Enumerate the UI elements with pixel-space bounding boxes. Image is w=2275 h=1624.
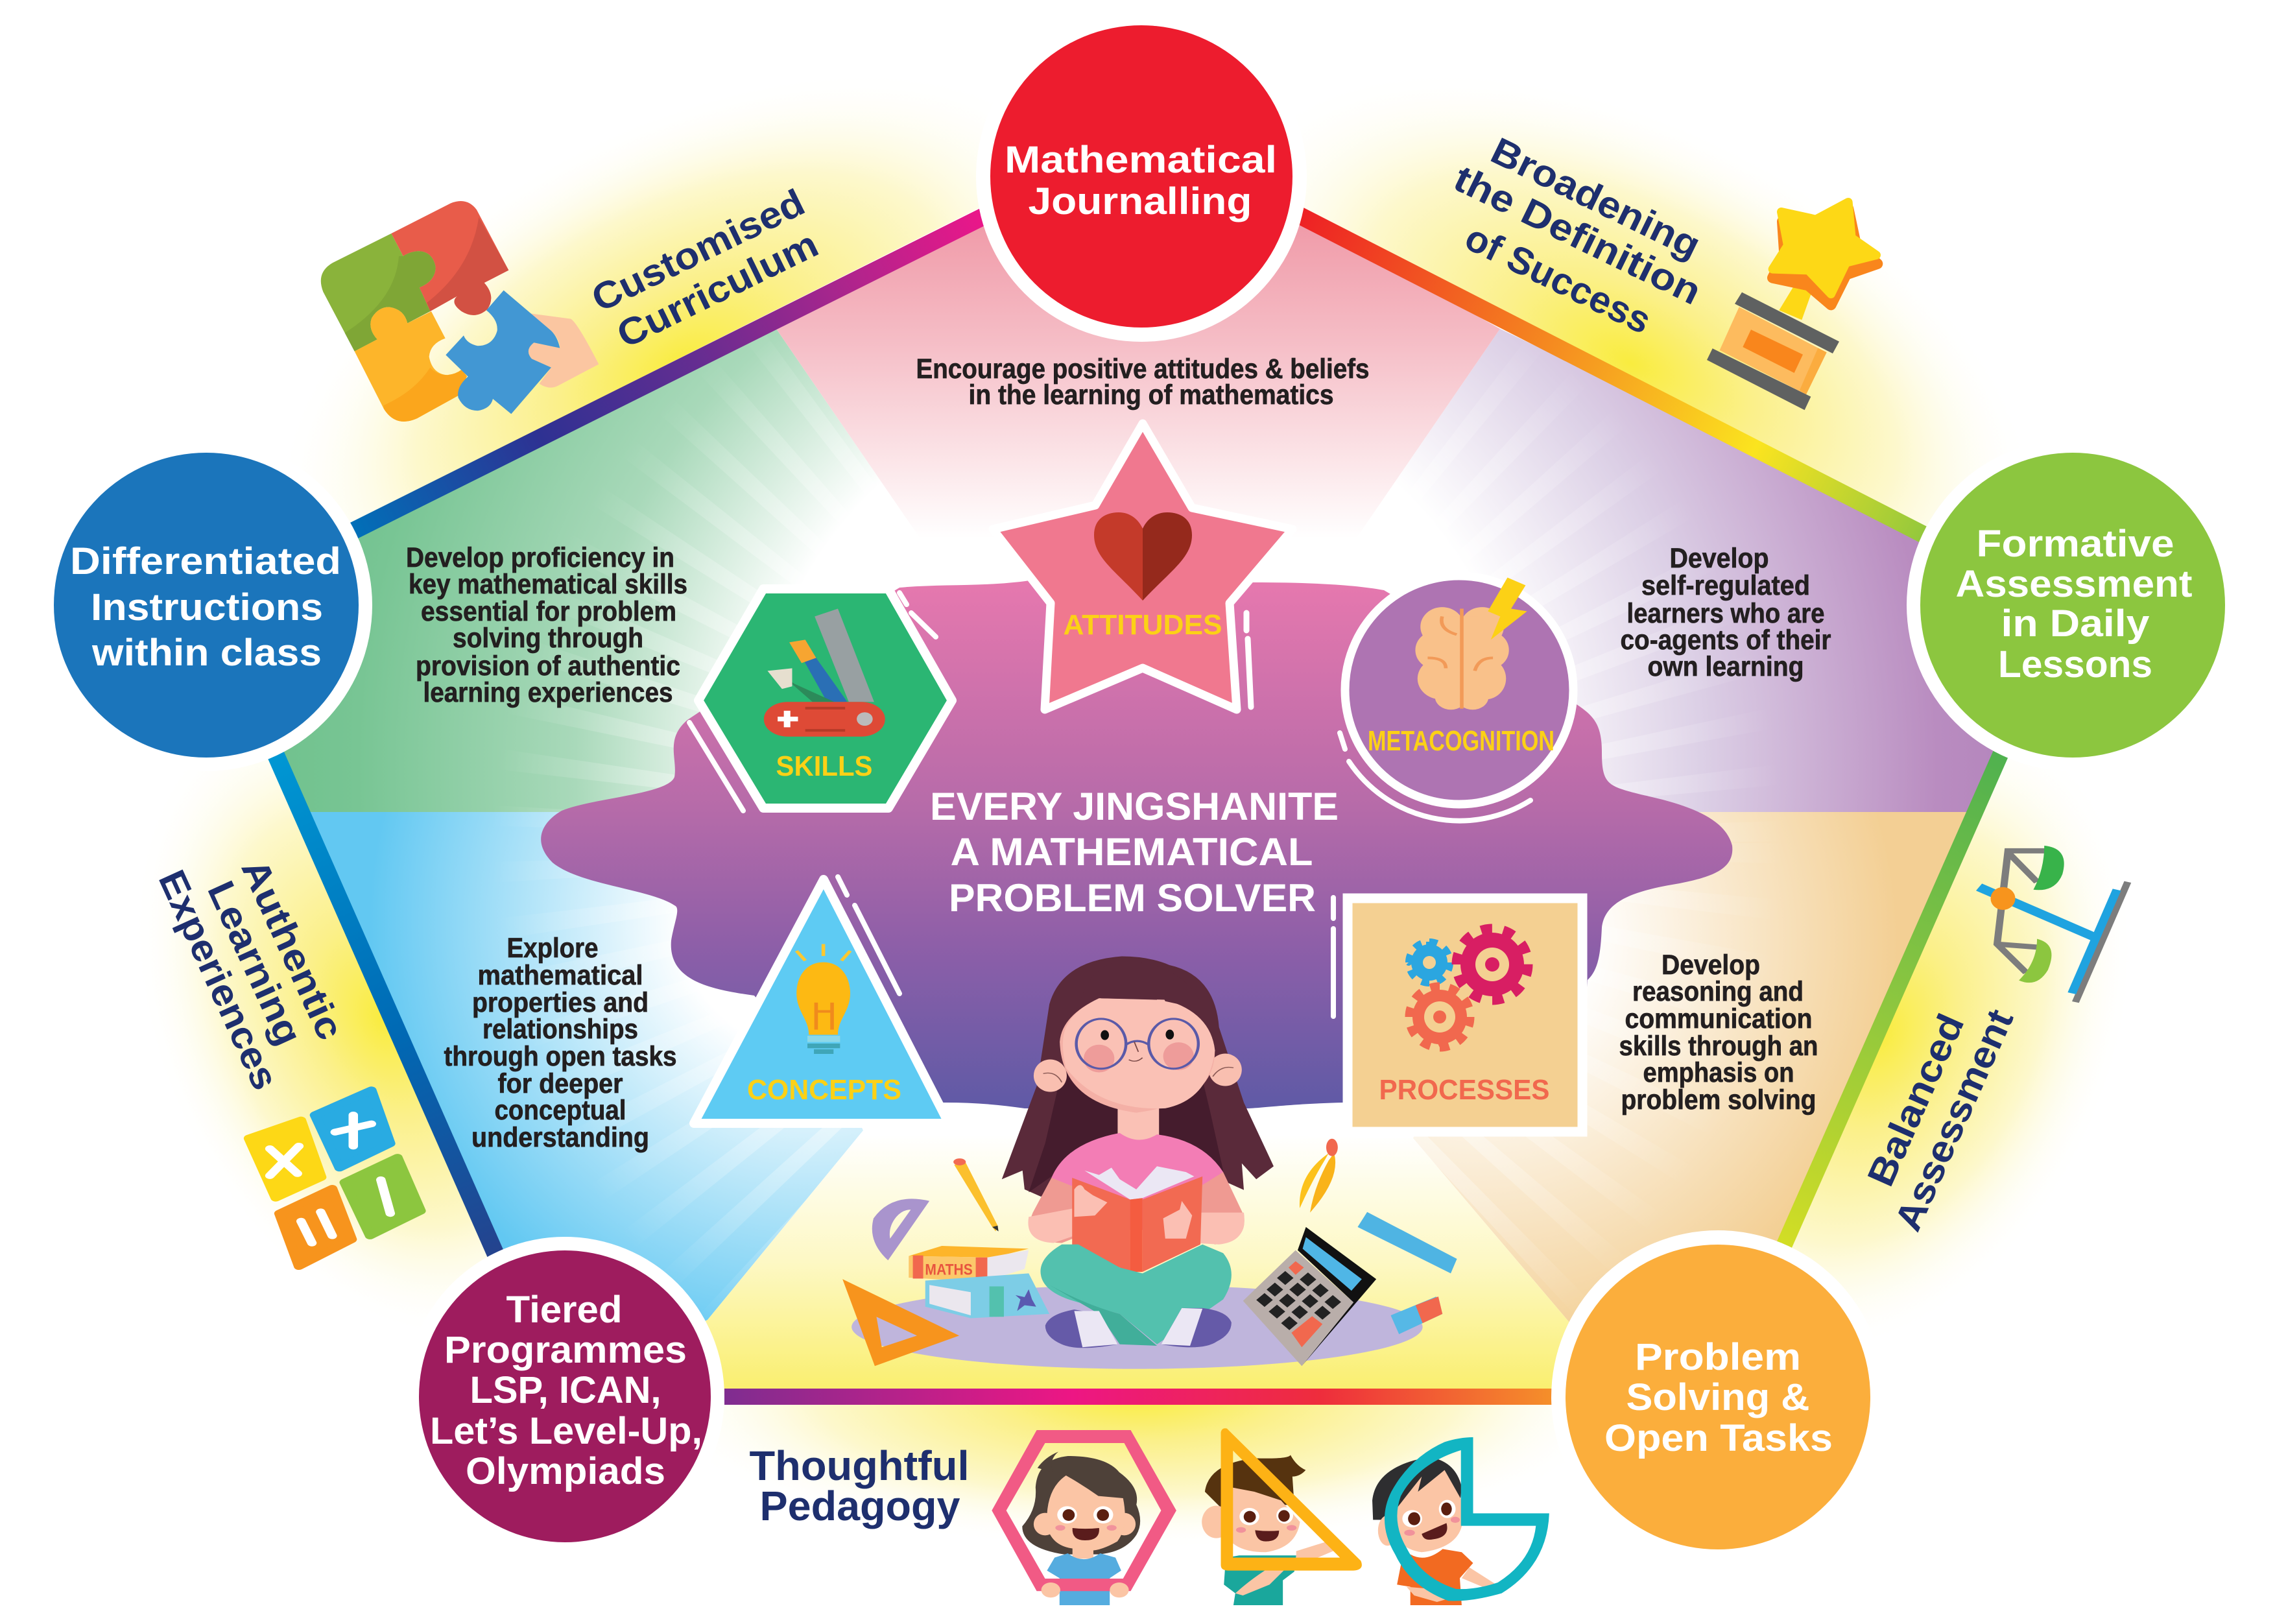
- icon: maths operator tiles: [249, 1090, 421, 1266]
- text block: concepts: through open tasks: [444, 1041, 677, 1072]
- icon panel: concepts triangle: [694, 877, 949, 1123]
- sector: concepts blue: [310, 812, 863, 1320]
- face: [1060, 998, 1215, 1113]
- label: Broadening the Definition of Success: [1447, 130, 1708, 342]
- label: Broadening the Definition of Success: the Definition: [1447, 157, 1708, 313]
- eraser: [1390, 1296, 1442, 1334]
- sector: processes beige: [1413, 812, 1966, 1322]
- icon: gears: [1409, 929, 1528, 1047]
- label: Customised Curriculum: [585, 181, 825, 356]
- text block: processes: communication: [1625, 1003, 1812, 1034]
- book pages: [1084, 1166, 1194, 1200]
- label: Authentic Learning Experiences: [150, 853, 351, 1096]
- icon panel: skills hexagon: [689, 589, 952, 811]
- text block: processes: Develop: [1662, 949, 1760, 981]
- icon: light bulb: [796, 944, 850, 1054]
- text block: metacognition: own learning: [1647, 651, 1804, 682]
- label: Authentic Learning Experiences: Authentic: [233, 853, 351, 1046]
- mouth and nose: [1129, 1042, 1143, 1061]
- circle: Tiered Programmes: Let’s Level-Up,: [430, 1410, 702, 1452]
- text block: concepts: Explore: [507, 933, 598, 964]
- icon: puzzle: [321, 201, 599, 422]
- neck: [1117, 1105, 1159, 1143]
- text block: attitudes: [916, 353, 1370, 411]
- circle: Formative Assessment: [1907, 439, 2239, 771]
- calculator: [1243, 1227, 1376, 1366]
- text block: processes: skills through an: [1619, 1031, 1818, 1062]
- glasses: [1077, 1019, 1198, 1069]
- label: Thoughtful Pedagogy: Thoughtful: [750, 1442, 969, 1489]
- text block: processes: [1619, 949, 1818, 1116]
- circle: Differentiated Instructions: Instructions: [91, 586, 323, 628]
- circle: Tiered Programmes: [405, 1237, 724, 1556]
- pencil: [953, 1158, 999, 1232]
- circle: Tiered Programmes: Olympiads: [466, 1450, 665, 1492]
- circle: Formative Assessment: in Daily: [2001, 603, 2149, 645]
- label: Authentic Learning Experiences: Experiences: [150, 864, 287, 1096]
- label: maths book: MATHS: [925, 1261, 973, 1278]
- label: Authentic Learning Experiences: Learning: [199, 875, 310, 1051]
- label: Customised Curriculum: Customised: [585, 181, 811, 320]
- text block: metacognition: self-regulated: [1641, 570, 1810, 601]
- text block: concepts: mathematical: [477, 960, 643, 991]
- icon: balance scale: [1979, 846, 2128, 1002]
- icon: trophy: [1707, 202, 1877, 410]
- mat: [852, 1285, 1423, 1369]
- label: processes: PROCESSES: [1379, 1074, 1550, 1106]
- central title: EVERY JINGSHANITE: [930, 785, 1339, 828]
- icon panel: attitudes star: [993, 424, 1292, 710]
- icon panel: metacognition circle: [1340, 576, 1573, 821]
- text block: skills: key mathematical skills: [409, 569, 687, 600]
- circle: Differentiated Instructions: [40, 439, 372, 771]
- ears: [1034, 1054, 1242, 1092]
- text block: processes: problem solving: [1621, 1084, 1816, 1116]
- central title: [930, 785, 1339, 920]
- text block: skills: provision of authentic: [416, 651, 680, 682]
- label: Customised Curriculum: Curriculum: [610, 223, 825, 356]
- sector: metacognition purple: [1412, 329, 1994, 812]
- hair back: [1002, 957, 1274, 1197]
- circle: Tiered Programmes: Tiered: [506, 1289, 623, 1331]
- label: Balanced Assessment: Balanced: [1859, 1008, 1972, 1193]
- circle: Mathematical Journalling: Journalling: [1029, 180, 1252, 222]
- circle: Formative Assessment: Assessment: [1956, 563, 2192, 605]
- text block: concepts: for deeper: [498, 1068, 623, 1099]
- hands on book: [1074, 1185, 1107, 1217]
- sector: attitudes pink: [777, 225, 1500, 514]
- text block: concepts: properties and: [472, 987, 649, 1018]
- compass: [1300, 1139, 1338, 1213]
- book cover: [1072, 1178, 1130, 1272]
- icon: heart: [1094, 512, 1192, 601]
- label: concepts: CONCEPTS: [747, 1074, 901, 1106]
- label: Broadening the Definition of Success: of Success: [1459, 216, 1658, 342]
- text block: metacognition: learners who are: [1626, 598, 1825, 629]
- child with triangle: [1202, 1428, 1362, 1605]
- text block: concepts: understanding: [471, 1122, 649, 1153]
- text block: processes: emphasis on: [1643, 1057, 1794, 1088]
- circle: Differentiated Instructions: within class: [91, 632, 322, 674]
- sector: skills green: [284, 329, 872, 812]
- shoes: [1045, 1309, 1117, 1348]
- circle: Tiered Programmes: Programmes: [444, 1329, 687, 1371]
- circle: Mathematical Journalling: [976, 11, 1307, 342]
- text block: metacognition: Develop: [1669, 543, 1769, 574]
- shirt: [1051, 1133, 1223, 1230]
- eyes: [1101, 1030, 1109, 1040]
- circle: Problem Solving: Solving &: [1626, 1376, 1809, 1418]
- text block: skills: essential for problem: [421, 596, 676, 627]
- circle: Mathematical Journalling: Mathematical: [1005, 139, 1277, 181]
- label: attitudes: ATTITUDES: [1064, 609, 1222, 641]
- text block: attitudes: in the learning of mathematics: [969, 379, 1333, 411]
- illustration: girl reading with maths objects: [842, 957, 1457, 1369]
- cheeks: [1084, 1045, 1114, 1073]
- child with hexagon: [992, 1430, 1176, 1605]
- text block: skills: learning experiences: [423, 677, 673, 708]
- text block: skills: [406, 542, 687, 708]
- protractor: [872, 1199, 929, 1260]
- label: Balanced Assessment: Assessment: [1887, 1003, 2021, 1237]
- child with quarter-circle frame: [1372, 1437, 1549, 1605]
- label: Broadening the Definition of Success: Broadening: [1484, 130, 1707, 267]
- central title: PROBLEM SOLVER: [949, 876, 1316, 920]
- central purple blob: [541, 580, 1732, 1108]
- bangs: [1078, 961, 1204, 1010]
- sector: bottom yellow: [706, 1130, 1569, 1396]
- circle: Problem Solving: Open Tasks: [1604, 1417, 1833, 1459]
- text block: concepts: [444, 933, 677, 1153]
- arms: [1030, 1178, 1095, 1243]
- text block: metacognition: [1620, 543, 1831, 682]
- central title: A MATHEMATICAL: [951, 830, 1313, 874]
- circle: Tiered Programmes: LSP, ICAN,: [470, 1369, 661, 1411]
- circle: Formative Assessment: Formative: [1977, 523, 2174, 565]
- circle: Differentiated Instructions: Differentiated: [70, 540, 341, 582]
- icon: tools: [764, 608, 885, 737]
- label: Thoughtful Pedagogy: [750, 1442, 969, 1529]
- text block: skills: Develop proficiency in: [406, 542, 674, 573]
- books: [909, 1246, 1049, 1319]
- circle: Formative Assessment: Lessons: [1998, 643, 2152, 686]
- text block: metacognition: co-agents of their: [1620, 625, 1831, 656]
- label: metacognition: METACOGNITION: [1368, 725, 1554, 757]
- text block: concepts: conceptual: [494, 1095, 626, 1126]
- ruler: [1357, 1212, 1457, 1273]
- label: skills: SKILLS: [776, 750, 873, 782]
- label: Thoughtful Pedagogy: Pedagogy: [760, 1483, 960, 1529]
- circle: Problem Solving: [1551, 1230, 1885, 1564]
- text block: skills: solving through: [453, 623, 643, 654]
- text block: concepts: relationships: [482, 1014, 638, 1045]
- icon: brain and lightning: [1415, 578, 1527, 710]
- icon panel: processes square: [1333, 898, 1582, 1132]
- legs: [1040, 1245, 1232, 1344]
- set square: [842, 1279, 959, 1366]
- pentagon panel with five coloured sectors: [284, 208, 1994, 1396]
- illustration: three children with shape frames: [992, 1428, 1549, 1605]
- circle: Problem Solving: Problem: [1635, 1336, 1801, 1378]
- text block: processes: reasoning and: [1632, 976, 1804, 1007]
- text block: attitudes: Encourage positive attitudes & beliefs: [916, 353, 1370, 385]
- frame edges with rainbow gradients: [272, 211, 2007, 1405]
